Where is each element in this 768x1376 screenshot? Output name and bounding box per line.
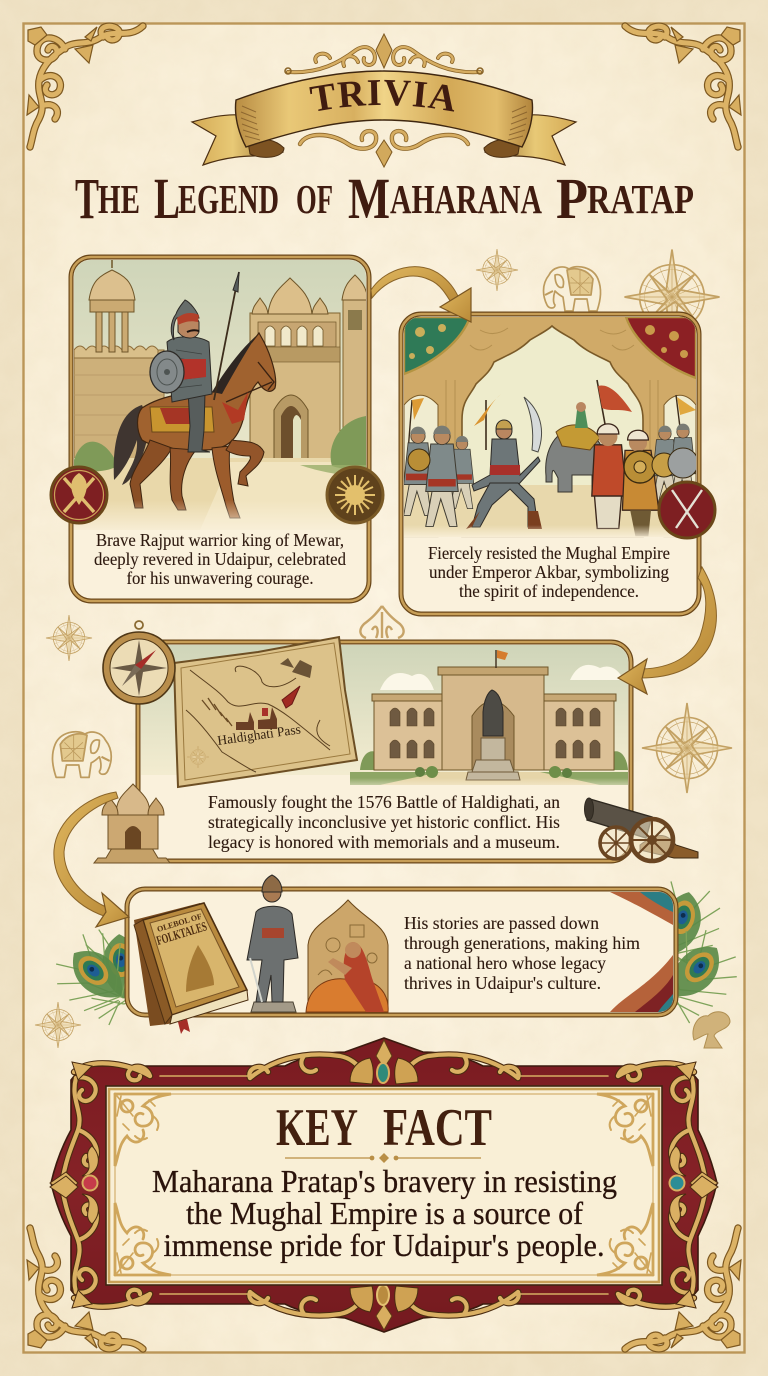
panel 2: resisting the Mughals bbox=[401, 314, 715, 614]
text: panel 2 caption bbox=[428, 543, 670, 601]
title: OF bbox=[296, 176, 333, 222]
map: Haldighati Pass bbox=[174, 637, 357, 787]
decorative textile pattern bbox=[610, 892, 673, 1012]
medallion: crossed swords bbox=[659, 482, 715, 538]
title bbox=[75, 166, 694, 231]
text: panel 3 caption: strategically inconclusive yet historic conflict. His bbox=[208, 812, 560, 832]
title: AHARANA bbox=[390, 176, 542, 222]
title: HE bbox=[98, 176, 140, 222]
illustration: museum and statue bbox=[141, 645, 628, 792]
text: panel 3 caption: legacy is honored with memorials and a museum. bbox=[208, 832, 560, 852]
medallion: crest bbox=[51, 467, 107, 523]
divider bbox=[285, 1153, 481, 1163]
text: key fact body: Maharana Pratap's bravery in resisting bbox=[152, 1163, 617, 1199]
text: panel 4 caption: His stories are passed down bbox=[404, 913, 599, 933]
text: panel 1 caption bbox=[94, 530, 346, 588]
text: panel 2 caption: Fiercely resisted the Mughal Empire bbox=[428, 543, 670, 563]
title: P bbox=[556, 166, 588, 231]
arrow: panel 1 to panel 2 bbox=[371, 267, 471, 322]
ornate red and gold frame bbox=[50, 1038, 718, 1332]
banner ribbon with TRIVIA: TRIVIA bbox=[309, 80, 454, 112]
banner bottom ornament bbox=[300, 131, 468, 167]
decorative compass and elephant motifs bbox=[35, 249, 732, 1048]
banner top ornament bbox=[285, 34, 483, 74]
text: panel 4 caption bbox=[404, 913, 640, 993]
title: EGEND bbox=[178, 176, 279, 222]
heading: KEY FACT: KEY bbox=[276, 1099, 358, 1157]
text: panel 1 caption: Brave Rajput warrior king of Mewar, bbox=[96, 530, 344, 550]
title: L bbox=[154, 166, 180, 231]
title: T bbox=[75, 166, 99, 231]
text: panel 3 caption: Famously fought the 1576 Battle of Haldighati, an bbox=[208, 792, 560, 812]
icon: book of folktales: FOLKTALES bbox=[154, 918, 209, 948]
arrow: panel 2 to panel 3 bbox=[618, 567, 716, 694]
text: panel 4 caption: thrives in Udaipur's culture. bbox=[404, 973, 601, 993]
cream inner panel bbox=[106, 1086, 662, 1285]
banners bbox=[408, 380, 696, 452]
text: panel 4 caption: a national hero whose legacy bbox=[404, 953, 606, 973]
heading: KEY FACT: FACT bbox=[383, 1099, 492, 1157]
rider bbox=[150, 272, 239, 452]
text: panel 2 caption: the spirit of independence. bbox=[459, 581, 639, 601]
icon: book of folktales: OLEBOL OF bbox=[156, 912, 203, 934]
text: panel 1 caption: deeply revered in Udaipur, celebrated bbox=[94, 549, 346, 569]
text: key fact body: the Mughal Empire is a source of bbox=[186, 1195, 583, 1231]
peacock feathers bbox=[44, 877, 749, 1031]
illustration: storyteller in niche bbox=[306, 900, 388, 1012]
heading: KEY FACT bbox=[276, 1099, 492, 1157]
medallion: sun bbox=[327, 467, 383, 523]
statue: warrior bbox=[247, 875, 298, 1012]
icon: cannon bbox=[584, 798, 698, 861]
title: RATAP bbox=[587, 176, 694, 222]
horse bbox=[114, 333, 276, 518]
text: key fact body bbox=[152, 1163, 617, 1263]
soldiers bbox=[450, 436, 474, 509]
text: panel 3 caption bbox=[208, 792, 560, 852]
compass bbox=[103, 621, 175, 704]
illustration: fort and horse rider bbox=[74, 256, 368, 536]
text: panel 2 caption: under Emperor Akbar, symbolizing bbox=[429, 562, 669, 582]
arrow: temple to panel 4 bbox=[54, 792, 129, 927]
key fact plaque bbox=[50, 1038, 718, 1332]
icon: temple bbox=[94, 784, 170, 863]
panel 1: warrior king bbox=[51, 256, 383, 601]
panel 4: legacy stories bbox=[127, 875, 676, 1034]
icon: book of folktales bbox=[134, 903, 248, 1034]
illustration: battle under arch bbox=[404, 317, 698, 539]
banner ribbon with TRIVIA bbox=[190, 70, 578, 166]
text: panel 1 caption: for his unwavering courage. bbox=[126, 568, 314, 588]
panel 3: Battle of Haldighati bbox=[103, 621, 631, 861]
text: panel 4 caption: through generations, making him bbox=[404, 933, 640, 953]
map: Haldighati Pass: Haldighati Pass bbox=[216, 721, 302, 748]
title: M bbox=[348, 166, 390, 231]
elephant bbox=[545, 436, 601, 492]
text: key fact body: immense pride for Udaipur's people. bbox=[164, 1227, 604, 1263]
